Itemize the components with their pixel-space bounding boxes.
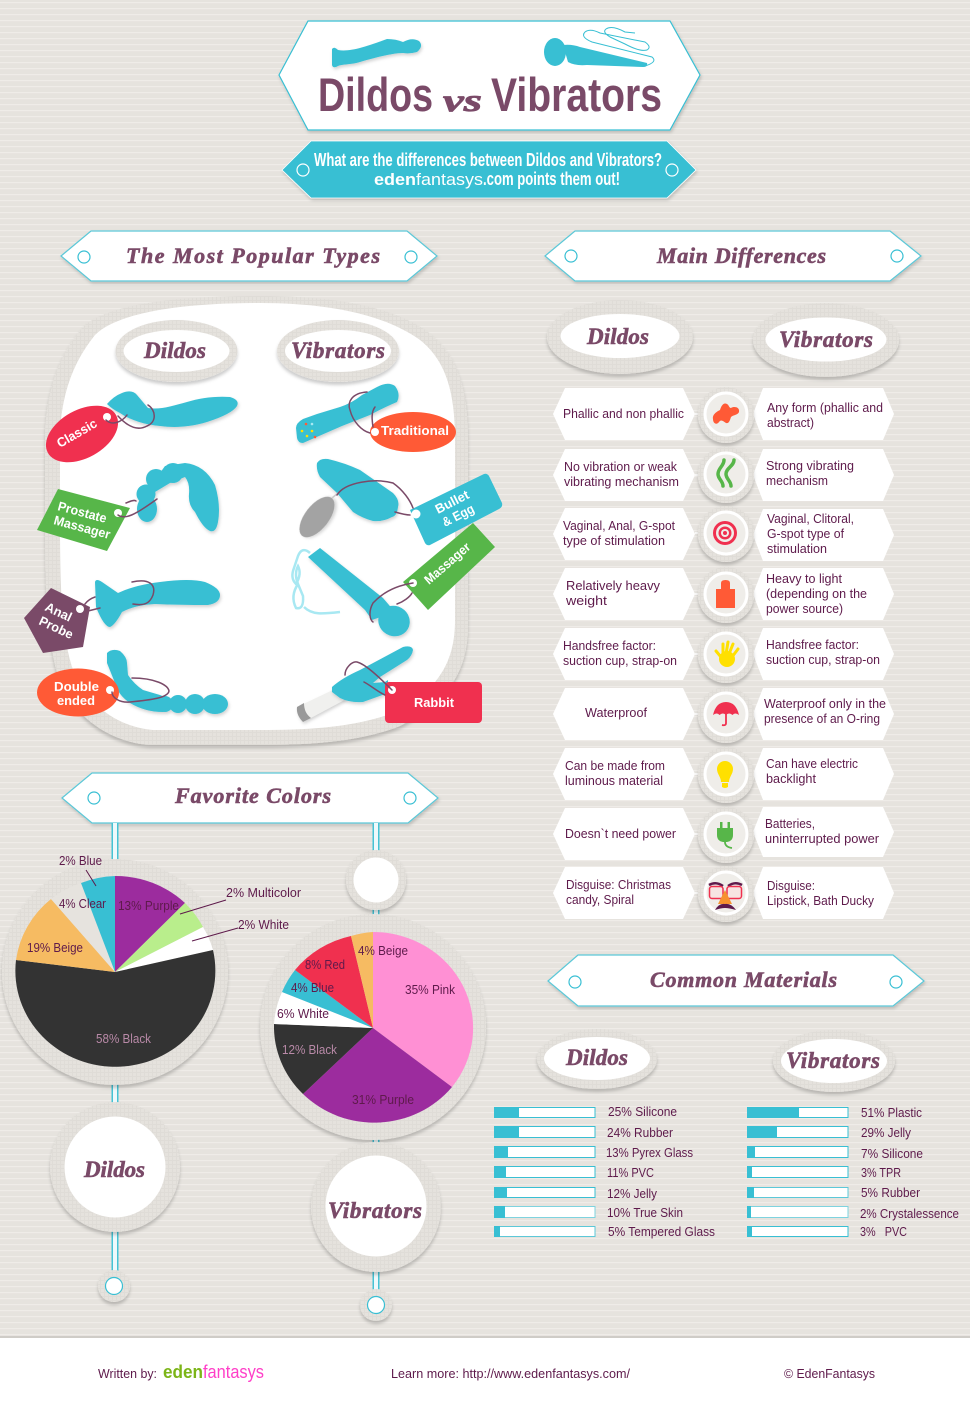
row: waterproof: Waterproof only in the bbox=[764, 696, 886, 711]
pie chart: vibrator colors: 4% Blue bbox=[291, 981, 334, 995]
pie chart: dildo colors: 58% Black bbox=[96, 1032, 152, 1046]
pie chart: vibrator colors bbox=[260, 914, 486, 1140]
row: waterproof: Waterproof bbox=[585, 705, 647, 720]
row: waterproof: presence of an O-ring bbox=[764, 711, 880, 726]
footer: fantasys bbox=[203, 1362, 264, 1382]
pole bbox=[112, 823, 118, 1279]
row: disguise: Lipstick, Bath Ducky bbox=[767, 893, 874, 908]
footer: Learn more: http://www.edenfantasys.com/ bbox=[391, 1367, 631, 1381]
oval label: dildos: Dildos bbox=[143, 338, 206, 363]
row: weight: (depending on the bbox=[766, 586, 867, 601]
item: rabbit: Rabbit bbox=[414, 695, 455, 710]
heading: the most popular types bbox=[61, 231, 437, 281]
row: stimulation: G-spot type of bbox=[767, 526, 844, 541]
row: vibration: vibrating mechanism bbox=[564, 474, 679, 489]
row: handsfree: Handsfree factor: bbox=[766, 637, 859, 652]
icon: wand vibrator bbox=[544, 28, 654, 67]
item: prostate massager bbox=[37, 463, 219, 551]
oval label: main differences vibrators bbox=[753, 303, 899, 377]
item: anal probe bbox=[24, 580, 220, 653]
pole bbox=[372, 823, 380, 1295]
row: stimulation: type of stimulation bbox=[563, 533, 665, 548]
bar chart: dildo materials: 11% PVC bbox=[607, 1166, 654, 1180]
item: anal probe: Probe bbox=[37, 613, 76, 642]
bar chart: dildo materials: 25% Silicone bbox=[608, 1105, 677, 1119]
row: disguise: candy, Spiral bbox=[566, 892, 634, 907]
bar chart: dildo materials: 5% Tempered Glass bbox=[608, 1225, 715, 1239]
title text: Vibrators bbox=[491, 68, 662, 121]
row: luminous: Can be made from bbox=[565, 758, 665, 773]
row: stimulation: Vaginal, Clitoral, bbox=[767, 511, 854, 526]
icon: disguise glasses bbox=[709, 883, 742, 910]
heading: common materials: Common Materials bbox=[650, 967, 837, 992]
item: anal probe: Anal bbox=[43, 599, 74, 625]
heading: the most popular types: The Most Popular Types bbox=[126, 243, 380, 268]
icon: umbrella bbox=[713, 702, 739, 725]
pie chart: dildo colors: 2% Blue bbox=[59, 854, 102, 868]
oval label: materials vibrators: Vibrators bbox=[786, 1048, 880, 1073]
pie chart: dildo colors: 4% Clear bbox=[59, 897, 106, 911]
item: traditional bbox=[296, 384, 456, 452]
pie chart: dildo colors: 2% White bbox=[238, 918, 289, 932]
row: vibration: No vibration or weak bbox=[564, 459, 677, 474]
row: vibration: mechanism bbox=[766, 473, 828, 488]
oval label: materials vibrators bbox=[773, 1030, 895, 1092]
row: handsfree bbox=[553, 627, 894, 683]
oval label: materials dildos bbox=[537, 1029, 657, 1089]
icon: splat bbox=[713, 404, 739, 424]
pie chart: vibrator colors: 35% Pink bbox=[405, 983, 456, 997]
item: classic bbox=[36, 391, 238, 474]
item: massager bbox=[292, 523, 495, 642]
subtitle banner: fantasys bbox=[416, 170, 483, 189]
disc label: dildos bbox=[50, 1102, 180, 1232]
row: power: Doesn`t need power bbox=[565, 826, 677, 841]
bar chart: vibrator materials: 3% TPR bbox=[861, 1166, 901, 1180]
bar chart: vibrator materials: 51% Plastic bbox=[861, 1106, 922, 1120]
bar chart: vibrator materials bbox=[747, 1106, 959, 1239]
subtitle banner: .com points them out! bbox=[483, 169, 620, 189]
footer: Written by: bbox=[98, 1367, 157, 1381]
bar chart: dildo materials bbox=[494, 1105, 715, 1239]
panel: popular types bbox=[24, 296, 502, 745]
pie chart: dildo colors: 19% Beige bbox=[27, 941, 83, 955]
item: double ended bbox=[37, 650, 228, 716]
row: form: Phallic and non phallic bbox=[563, 406, 684, 421]
item: double ended: ended bbox=[57, 693, 95, 708]
row: power: uninterrupted power bbox=[765, 831, 880, 846]
bar chart: vibrator materials: 5% Rubber bbox=[861, 1186, 920, 1200]
oval label: main differences vibrators: Vibrators bbox=[779, 327, 873, 352]
oval label: dildos bbox=[116, 320, 238, 382]
row: weight: Heavy to light bbox=[766, 571, 842, 586]
bar chart: vibrator materials: 2% Crystalessence bbox=[860, 1207, 959, 1221]
row: stimulation: stimulation bbox=[767, 541, 827, 556]
row: power: Batteries, bbox=[765, 816, 815, 831]
subtitle banner: eden bbox=[374, 170, 416, 189]
dildos colors column bbox=[2, 823, 301, 1302]
oval label: main differences dildos: Dildos bbox=[586, 324, 649, 349]
footer: © EdenFantasys bbox=[784, 1367, 875, 1381]
pie chart: vibrator colors: 12% Black bbox=[282, 1043, 338, 1057]
item: prostate massager: Massager bbox=[52, 512, 112, 542]
row: stimulation bbox=[553, 506, 894, 562]
row: weight bbox=[553, 567, 894, 623]
item: bullet and egg: Bullet bbox=[433, 487, 472, 517]
disc label: vibrators: Vibrators bbox=[328, 1198, 422, 1223]
oval label: vibrators: Vibrators bbox=[291, 338, 385, 363]
item: bullet and egg bbox=[293, 459, 502, 545]
title banner bbox=[279, 21, 700, 130]
bar chart: vibrator materials: 3% PVC bbox=[860, 1225, 907, 1239]
pie chart: vibrator colors: 31% Purple bbox=[352, 1093, 414, 1107]
oval label: vibrators bbox=[277, 320, 399, 382]
row: weight: weight bbox=[565, 593, 607, 608]
bar chart: vibrator materials: 29% Jelly bbox=[861, 1126, 912, 1140]
icon: target bbox=[713, 521, 737, 545]
title text bbox=[318, 68, 662, 121]
row: handsfree: Handsfree factor: bbox=[563, 638, 656, 653]
subtitle banner: What are the differences between Dildos and Vibrators? bbox=[314, 150, 662, 170]
disc label: dildos: Dildos bbox=[83, 1157, 145, 1182]
disc label: vibrators bbox=[311, 1142, 441, 1272]
row: handsfree: suction cup, strap-on bbox=[766, 652, 880, 667]
item: prostate massager: Prostate bbox=[56, 498, 108, 526]
bar chart: dildo materials: 10% True Skin bbox=[607, 1206, 683, 1220]
pie chart: vibrator colors: 6% White bbox=[277, 1007, 329, 1021]
row: luminous: Can have electric bbox=[766, 756, 858, 771]
bar chart: vibrator materials: 7% Silicone bbox=[861, 1147, 923, 1161]
heading: favorite colors bbox=[62, 773, 438, 823]
icon: light bulb bbox=[717, 761, 733, 788]
pie chart: vibrator colors: 8% Red bbox=[305, 958, 345, 972]
row: power bbox=[553, 807, 894, 863]
icon: dildo bbox=[332, 39, 421, 67]
row: weight: power source) bbox=[766, 601, 843, 616]
item: classic: Classic bbox=[54, 416, 100, 451]
icon: plug bbox=[717, 822, 733, 848]
row: disguise: Disguise: Christmas bbox=[566, 877, 671, 892]
row: vibration bbox=[553, 447, 894, 503]
item: double ended: Double bbox=[54, 679, 99, 694]
bar chart: dildo materials: 13% Pyrex Glass bbox=[606, 1146, 693, 1160]
footer: eden bbox=[163, 1362, 203, 1382]
oval label: main differences dildos bbox=[547, 300, 693, 374]
row: waterproof bbox=[553, 687, 894, 743]
row: luminous: luminous material bbox=[565, 773, 663, 788]
row: disguise bbox=[553, 866, 894, 922]
pole end bbox=[360, 1289, 392, 1321]
oval label: materials dildos: Dildos bbox=[565, 1045, 628, 1070]
title text: Dildos bbox=[318, 68, 433, 121]
bar chart: dildo materials: 12% Jelly bbox=[607, 1187, 658, 1201]
heading: favorite colors: Favorite Colors bbox=[174, 783, 331, 808]
row: luminous: backlight bbox=[766, 771, 816, 786]
pie chart: dildo colors: 13% Purple bbox=[118, 899, 179, 913]
heading: main differences: Main Differences bbox=[656, 243, 826, 268]
row: disguise: Disguise: bbox=[767, 878, 815, 893]
item: massager: Massager bbox=[421, 539, 473, 587]
item: traditional: Traditional bbox=[381, 423, 449, 438]
item: rabbit bbox=[297, 646, 482, 723]
pole end bbox=[98, 1270, 130, 1302]
row: form: Any form (phallic and bbox=[767, 400, 883, 415]
icon: vibration waves bbox=[718, 460, 734, 486]
row: form: abstract) bbox=[767, 415, 814, 430]
icon: weight bbox=[716, 580, 735, 608]
row: stimulation: Vaginal, Anal, G-spot bbox=[563, 518, 675, 533]
row: handsfree: suction cup, strap-on bbox=[563, 653, 677, 668]
row: vibration: Strong vibrating bbox=[766, 458, 854, 473]
bar chart: dildo materials: 24% Rubber bbox=[607, 1126, 673, 1140]
heading: main differences bbox=[545, 231, 921, 281]
vibrators colors column bbox=[260, 823, 486, 1321]
subtitle banner bbox=[282, 141, 696, 198]
row: form bbox=[553, 387, 894, 443]
icon: hand bbox=[716, 642, 738, 667]
heading: common materials bbox=[548, 955, 924, 1006]
small disc bbox=[346, 850, 406, 910]
footer bbox=[0, 1336, 970, 1412]
row: weight: Relatively heavy bbox=[566, 578, 660, 593]
item: bullet and egg: & Egg bbox=[440, 501, 477, 530]
row: luminous bbox=[553, 747, 894, 803]
pie chart: vibrator colors: 4% Beige bbox=[358, 944, 408, 958]
title text: vs bbox=[443, 82, 482, 118]
pie chart: dildo colors bbox=[2, 854, 301, 1085]
pie chart: dildo colors: 2% Multicolor bbox=[226, 886, 301, 900]
